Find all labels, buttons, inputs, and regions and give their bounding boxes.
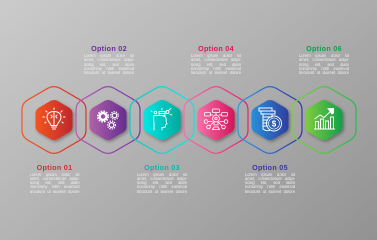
icon: gears: [98, 111, 118, 129]
step 4: network hexagon: [184, 87, 248, 153]
text block: Option 02: [84, 44, 134, 75]
heading: Option 06: Option 06: [306, 44, 342, 53]
step 5: coins hexagon: [238, 87, 302, 153]
heading: Option 05: Option 05: [252, 162, 288, 172]
step 2: gears hexagon: [76, 87, 140, 153]
heading: Option 01: Option 01: [37, 162, 72, 172]
heading: Option 02: Option 02: [91, 44, 127, 53]
text block: Option 05: [245, 162, 295, 194]
icon: brain lightbulb: [43, 108, 65, 129]
text block: Option 03: [137, 162, 187, 194]
icon: central bulb network: [204, 109, 228, 130]
heading: Option 03: Option 03: [144, 162, 180, 172]
heading: Option 04: Option 04: [198, 44, 234, 53]
icon: rising bar chart: [314, 108, 335, 129]
text block: Option 04: [191, 44, 241, 75]
step 6: growth chart hexagon: [292, 87, 356, 153]
icon: head with ideas: [151, 108, 172, 130]
icon: coin stack with dollar: [259, 108, 282, 131]
text block: Option 06: [299, 44, 349, 75]
step 3: head hexagon: [130, 87, 194, 153]
step 1: lightbulb hexagon: [22, 87, 86, 153]
text block: Option 01: [30, 162, 80, 194]
icon: dollar sign: $: [272, 119, 277, 128]
